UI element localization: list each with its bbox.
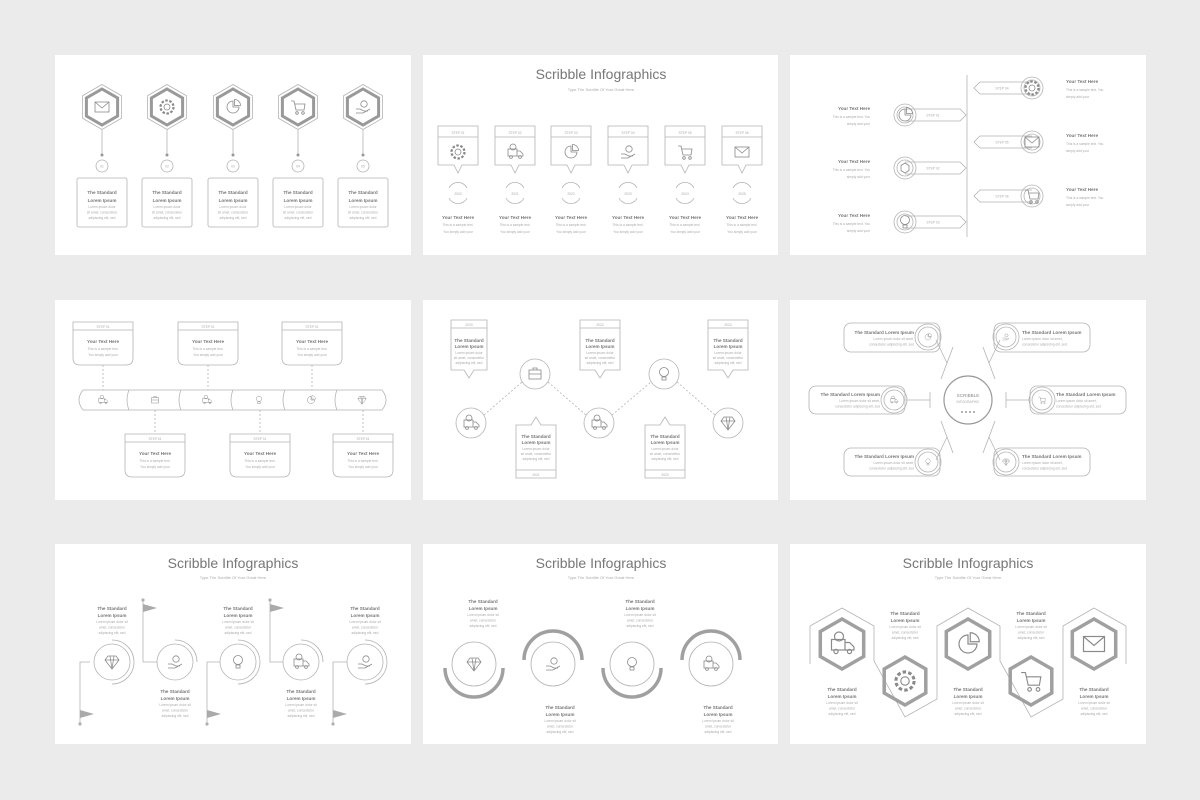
texts: The Standard bbox=[953, 687, 983, 692]
step 05 right bbox=[974, 131, 1104, 153]
texts: amet, consectetur bbox=[829, 706, 856, 710]
step 03 2022 bbox=[551, 126, 591, 234]
texts: Lorem Ipsum bbox=[287, 696, 315, 701]
texts bbox=[96, 606, 381, 718]
callout 2023: The Standard bbox=[650, 434, 680, 439]
texts: adipiscing elit, sed bbox=[547, 730, 574, 734]
bottom box 2: STEP 01 bbox=[253, 437, 267, 441]
center circle bbox=[944, 376, 992, 424]
step 04: 04 bbox=[296, 164, 300, 168]
circle nodes bbox=[452, 642, 733, 686]
step 02 2021 bbox=[495, 126, 535, 234]
step 05 2024: Your Text Here bbox=[669, 215, 701, 220]
pill left bbox=[809, 386, 907, 414]
step 03 left: STEP 03 bbox=[926, 220, 940, 224]
slide backgrounds bbox=[55, 55, 1146, 744]
step 04 right: Your Text Here bbox=[1066, 79, 1098, 84]
callout 2023: 2023 bbox=[661, 473, 669, 477]
texts: amet, consectetur bbox=[705, 724, 732, 728]
step 05 right: This is a sample text. You bbox=[1066, 142, 1104, 146]
callout 2020: The Standard bbox=[454, 338, 484, 343]
callout 2020: Lorem ipsum dolor bbox=[455, 351, 484, 355]
step 05: Lorem Ipsum bbox=[349, 198, 377, 203]
bottom box 2: This is a sample text. bbox=[245, 459, 276, 463]
texts: amet, consectetur bbox=[99, 626, 126, 630]
step 02 left: This is a sample text. You bbox=[833, 168, 870, 172]
callout 2022 bbox=[580, 320, 620, 378]
pill left: Lorem ipsum dolor sit amet, bbox=[839, 399, 880, 403]
slide 9: hexagon chain bbox=[810, 555, 1126, 717]
slide 6: radial mind map bbox=[809, 323, 1126, 476]
texts: Lorem Ipsum bbox=[224, 613, 252, 618]
pill top-right: consectetur adipiscing elit, sed bbox=[1022, 342, 1067, 346]
top box 2: STEP 01 bbox=[201, 325, 215, 329]
step 01: adipiscing elit, sed bbox=[89, 216, 116, 220]
texts: adipiscing elit, sed bbox=[955, 712, 982, 716]
callout 2022: Lorem Ipsum bbox=[586, 344, 614, 349]
callout 2020 bbox=[451, 320, 487, 378]
callout 2024: The Standard bbox=[713, 338, 743, 343]
step 03 left bbox=[833, 211, 966, 233]
callout 2021: adipiscing elit, sed bbox=[523, 457, 550, 461]
texts: The Standard bbox=[160, 689, 190, 694]
pill left: consectetur adipiscing elit, sed bbox=[835, 404, 880, 408]
step 05 2024: 2024 bbox=[681, 192, 689, 196]
step 02: Lorem ipsum dolor bbox=[153, 205, 182, 209]
callout 2023: Lorem Ipsum bbox=[651, 440, 679, 445]
small hex 2 bbox=[884, 657, 926, 705]
bottom box 1: This is a sample text. bbox=[140, 459, 171, 463]
big hex 3 bbox=[946, 619, 990, 669]
title: Scribble Infographics bbox=[536, 66, 666, 82]
step 06 2025: You simply add your bbox=[727, 230, 758, 234]
step 02 2021: You simply add your bbox=[500, 230, 531, 234]
step 02: The Standard bbox=[152, 190, 182, 195]
texts: The Standard bbox=[468, 599, 498, 604]
step 05 2024: This is a sample text. bbox=[670, 223, 701, 227]
texts: Lorem ipsum dolor sit bbox=[1015, 625, 1047, 629]
subtitle: Type The Subtitle Of Your Great Here bbox=[935, 575, 1002, 580]
step 03 2022: You simply add your bbox=[556, 230, 587, 234]
texts: amet, consectetur bbox=[955, 706, 982, 710]
pill top-left: consectetur adipiscing elit, sed bbox=[869, 342, 914, 346]
texts: Lorem Ipsum bbox=[954, 694, 982, 699]
step 03 bbox=[208, 84, 258, 227]
pill top-right: Lorem ipsum dolor sit amet, bbox=[1022, 337, 1063, 341]
step 01 2020: 2020 bbox=[454, 192, 462, 196]
callout 2022: adipiscing elit, sed bbox=[587, 361, 614, 365]
texts: The Standard bbox=[223, 606, 253, 611]
center circle: INFOGRAPHIC bbox=[957, 400, 980, 404]
step 04 right: This is a sample text. You bbox=[1066, 88, 1104, 92]
callout 2023: adipiscing elit, sed bbox=[652, 457, 679, 461]
pill bottom-right bbox=[993, 448, 1090, 476]
pill bottom-right: The Standard Lorem Ipsum bbox=[1022, 454, 1081, 459]
callout 2020: adipiscing elit, sed bbox=[456, 361, 483, 365]
step 03 left: Your Text Here bbox=[838, 213, 870, 218]
step 02: adipiscing elit, sed bbox=[154, 216, 181, 220]
step 04 2023 bbox=[608, 126, 648, 234]
step 06 right: Your Text Here bbox=[1066, 187, 1098, 192]
texts: The Standard bbox=[97, 606, 127, 611]
callout 2021: 2021 bbox=[532, 473, 540, 477]
step 01 2020: Your Text Here bbox=[442, 215, 474, 220]
flag path bbox=[79, 599, 387, 725]
step 02 2021: STEP 02 bbox=[508, 131, 522, 135]
bottom box 1: Your Text Here bbox=[139, 451, 171, 456]
step 03 2022: This is a sample text. bbox=[556, 223, 587, 227]
callout 2021 bbox=[516, 417, 556, 478]
step 04: adipiscing elit, sed bbox=[285, 216, 312, 220]
title: Scribble Infographics bbox=[536, 555, 666, 571]
step 01 2020: STEP 01 bbox=[451, 131, 465, 135]
texts: adipiscing elit, sed bbox=[705, 730, 732, 734]
top box 3: Your Text Here bbox=[296, 339, 328, 344]
step 01: Lorem Ipsum bbox=[88, 198, 116, 203]
step 05 2024 bbox=[665, 126, 705, 234]
pill right: consectetur adipiscing elit, sed bbox=[1056, 404, 1101, 408]
step 01 2020: You simply add your bbox=[443, 230, 474, 234]
step 03: adipiscing elit, sed bbox=[220, 216, 247, 220]
texts: Lorem Ipsum bbox=[1080, 694, 1108, 699]
step 03: Lorem Ipsum bbox=[219, 198, 247, 203]
step 05 right: STEP 05 bbox=[995, 140, 1009, 144]
texts: The Standard bbox=[890, 611, 920, 616]
step 04 2023: You simply add your bbox=[613, 230, 644, 234]
step 04: sit amet, consectetur bbox=[283, 210, 314, 214]
step 06 right: STEP 06 bbox=[995, 194, 1009, 198]
texts: amet, consectetur bbox=[627, 618, 654, 622]
texts: Lorem Ipsum bbox=[161, 696, 189, 701]
circle nodes bbox=[94, 644, 383, 680]
callout 2022: Lorem ipsum dolor bbox=[586, 351, 615, 355]
step 01 left: Your Text Here bbox=[838, 106, 870, 111]
texts: Lorem ipsum dolor sit bbox=[467, 613, 499, 617]
title: Scribble Infographics bbox=[903, 555, 1033, 571]
slide 8: arc chain bbox=[445, 555, 740, 734]
texts: Lorem Ipsum bbox=[469, 606, 497, 611]
top box 2: You simply add your bbox=[193, 353, 224, 357]
step 02: 02 bbox=[165, 164, 169, 168]
step 04 right bbox=[974, 77, 1104, 99]
callout 2021: sit amet, consectetur bbox=[521, 452, 552, 456]
bottom box 1: You simply add your bbox=[140, 465, 171, 469]
callout 2024: sit amet, consectetur bbox=[713, 356, 744, 360]
slide 7: flags and circles bbox=[79, 555, 387, 725]
big hex 5 bbox=[1072, 619, 1116, 669]
circle nodes bbox=[456, 359, 743, 438]
step 05 2024: You simply add your bbox=[670, 230, 701, 234]
bottom box 2: Your Text Here bbox=[244, 451, 276, 456]
step 03 2022: 2022 bbox=[567, 192, 575, 196]
texts bbox=[826, 611, 1110, 716]
texts: amet, consectetur bbox=[352, 626, 379, 630]
thick arcs bbox=[445, 631, 740, 697]
texts: adipiscing elit, sed bbox=[829, 712, 856, 716]
texts: Lorem ipsum dolor sit bbox=[222, 620, 254, 624]
step 01 left bbox=[833, 104, 966, 126]
pill bottom-right: consectetur adipiscing elit, sed bbox=[1022, 466, 1067, 470]
step 03: Lorem ipsum dolor bbox=[219, 205, 248, 209]
step 01 left: This is a sample text. You bbox=[833, 115, 870, 119]
step 02: sit amet, consectetur bbox=[152, 210, 183, 214]
step 04 2023: 2023 bbox=[624, 192, 632, 196]
step 04 2023: Your Text Here bbox=[612, 215, 644, 220]
top box 1: You simply add your bbox=[88, 353, 119, 357]
bottom box 3: You simply add your bbox=[348, 465, 379, 469]
slide 1: hexagon steps bbox=[77, 84, 388, 227]
texts: amet, consectetur bbox=[225, 626, 252, 630]
texts: The Standard bbox=[1079, 687, 1109, 692]
step 01 2020: This is a sample text. bbox=[443, 223, 474, 227]
texts: amet, consectetur bbox=[288, 708, 315, 712]
step 03: The Standard bbox=[218, 190, 248, 195]
step 02 left: Your Text Here bbox=[838, 159, 870, 164]
step 05 2024: STEP 05 bbox=[678, 131, 692, 135]
texts bbox=[467, 599, 734, 734]
texts: Lorem Ipsum bbox=[626, 606, 654, 611]
subtitle: Type The Subtitle Of Your Great Here bbox=[568, 575, 635, 580]
step 01 bbox=[77, 84, 127, 227]
top box 2 bbox=[178, 322, 238, 390]
texts: adipiscing elit, sed bbox=[1081, 712, 1108, 716]
top box 1: This is a sample text. bbox=[88, 347, 119, 351]
subtitle: Type The Subtitle Of Your Great Here bbox=[568, 87, 635, 92]
texts: Lorem ipsum dolor sit bbox=[349, 620, 381, 624]
step 02 left: STEP 02 bbox=[926, 166, 940, 170]
pill right: The Standard Lorem Ipsum bbox=[1056, 392, 1115, 397]
texts: adipiscing elit, sed bbox=[162, 714, 189, 718]
step 01: Lorem ipsum dolor bbox=[88, 205, 117, 209]
step 03 2022: Your Text Here bbox=[555, 215, 587, 220]
texts: adipiscing elit, sed bbox=[99, 631, 126, 635]
step 02 left: simply add your bbox=[847, 175, 871, 179]
pill top-left: The Standard Lorem Ipsum bbox=[855, 330, 914, 335]
texts: adipiscing elit, sed bbox=[352, 631, 379, 635]
step 01 left: simply add your bbox=[847, 122, 871, 126]
step 03: 03 bbox=[231, 164, 235, 168]
texts: adipiscing elit, sed bbox=[627, 624, 654, 628]
step 04 right: STEP 04 bbox=[995, 86, 1009, 90]
step 02 2021: This is a sample text. bbox=[500, 223, 531, 227]
texts: Lorem ipsum dolor sit bbox=[952, 701, 984, 705]
step 05: The Standard bbox=[348, 190, 378, 195]
step 06 2025: Your Text Here bbox=[726, 215, 758, 220]
band bbox=[79, 390, 386, 410]
bottom box 1 bbox=[125, 410, 185, 477]
step 03: sit amet, consectetur bbox=[218, 210, 249, 214]
center circle: SCRIBBLE bbox=[957, 393, 979, 398]
texts: Lorem ipsum dolor sit bbox=[624, 613, 656, 617]
texts: Lorem Ipsum bbox=[546, 712, 574, 717]
callout 2022: The Standard bbox=[585, 338, 615, 343]
callout 2020: 2020 bbox=[465, 323, 473, 327]
texts: The Standard bbox=[350, 606, 380, 611]
step 04: Lorem Ipsum bbox=[284, 198, 312, 203]
callout 2022: sit amet, consectetur bbox=[585, 356, 616, 360]
texts: adipiscing elit, sed bbox=[1018, 636, 1045, 640]
step 04 2023: This is a sample text. bbox=[613, 223, 644, 227]
callout 2021: Lorem ipsum dolor bbox=[522, 447, 551, 451]
texts: Lorem ipsum dolor sit bbox=[1078, 701, 1110, 705]
step 02 bbox=[142, 84, 192, 227]
slide 5: zigzag timeline bbox=[451, 320, 748, 478]
step 03 left: simply add your bbox=[847, 229, 871, 233]
texts: Lorem ipsum dolor sit bbox=[159, 703, 191, 707]
step 06 right: This is a sample text. You bbox=[1066, 196, 1104, 200]
texts: Lorem Ipsum bbox=[98, 613, 126, 618]
step 02 2021: Your Text Here bbox=[499, 215, 531, 220]
texts: adipiscing elit, sed bbox=[225, 631, 252, 635]
slide 2: timeline steps bbox=[438, 66, 762, 234]
step 06 2025 bbox=[722, 126, 762, 234]
top box 2: Your Text Here bbox=[192, 339, 224, 344]
texts: Lorem Ipsum bbox=[1017, 618, 1045, 623]
callout 2020: sit amet, consectetur bbox=[454, 356, 485, 360]
callout 2021: The Standard bbox=[521, 434, 551, 439]
texts: The Standard bbox=[827, 687, 857, 692]
pill right bbox=[1029, 386, 1126, 414]
step 02 2021: 2021 bbox=[511, 192, 519, 196]
step 04: Lorem ipsum dolor bbox=[284, 205, 313, 209]
callout 2021: Lorem Ipsum bbox=[522, 440, 550, 445]
pill top-left bbox=[844, 323, 941, 352]
step 01: 01 bbox=[100, 164, 104, 168]
texts: amet, consectetur bbox=[162, 708, 189, 712]
bottom box 2: You simply add your bbox=[245, 465, 276, 469]
step 06 right bbox=[974, 185, 1104, 207]
step 03 left: This is a sample text. You bbox=[833, 222, 870, 226]
texts: amet, consectetur bbox=[892, 630, 919, 634]
texts: Lorem ipsum dolor sit bbox=[285, 703, 317, 707]
step 05: adipiscing elit, sed bbox=[350, 216, 377, 220]
callout 2024: Lorem Ipsum bbox=[714, 344, 742, 349]
pill bottom-left bbox=[844, 448, 941, 476]
dashed connectors bbox=[484, 382, 715, 415]
texts: Lorem Ipsum bbox=[891, 618, 919, 623]
step 05: sit amet, consectetur bbox=[348, 210, 379, 214]
texts: adipiscing elit, sed bbox=[892, 636, 919, 640]
texts: amet, consectetur bbox=[1081, 706, 1108, 710]
pill left: The Standard Lorem Ipsum bbox=[821, 392, 880, 397]
step 01 2020 bbox=[438, 126, 478, 234]
pill bottom-left: consectetur adipiscing elit, sed bbox=[869, 466, 914, 470]
texts: Lorem Ipsum bbox=[704, 712, 732, 717]
step 06 2025: 2025 bbox=[738, 192, 746, 196]
step 06 2025: This is a sample text. bbox=[727, 223, 758, 227]
top box 3: STEP 01 bbox=[305, 325, 319, 329]
callout 2024: adipiscing elit, sed bbox=[715, 361, 742, 365]
callout 2023 bbox=[645, 417, 685, 478]
step 03 2022: STEP 03 bbox=[564, 131, 578, 135]
step 04 bbox=[273, 84, 323, 227]
slide 3: vertical arrow timeline bbox=[833, 75, 1104, 237]
top box 3 bbox=[282, 322, 342, 390]
texts: Lorem ipsum dolor sit bbox=[544, 719, 576, 723]
slide 4: band timeline bbox=[73, 322, 393, 477]
bottom box 1: STEP 01 bbox=[148, 437, 162, 441]
bottom box 2 bbox=[230, 410, 290, 477]
step 04 2023: STEP 04 bbox=[621, 131, 635, 135]
bottom box 3 bbox=[333, 410, 393, 477]
top box 1: STEP 01 bbox=[96, 325, 110, 329]
texts: Lorem Ipsum bbox=[351, 613, 379, 618]
texts: The Standard bbox=[1016, 611, 1046, 616]
callout 2023: sit amet, consectetur bbox=[650, 452, 681, 456]
pill bottom-right: Lorem ipsum dolor sit amet, bbox=[1022, 461, 1063, 465]
bottom box 3: This is a sample text. bbox=[348, 459, 379, 463]
texts: Lorem Ipsum bbox=[828, 694, 856, 699]
big hex 1 bbox=[820, 619, 864, 669]
callout 2023: Lorem ipsum dolor bbox=[651, 447, 680, 451]
step 02 left bbox=[833, 157, 966, 179]
step 01: sit amet, consectetur bbox=[87, 210, 118, 214]
pill top-left: Lorem ipsum dolor sit amet, bbox=[873, 337, 914, 341]
step 06 right: simply add your bbox=[1066, 203, 1090, 207]
step 05: Lorem ipsum dolor bbox=[349, 205, 378, 209]
texts: Lorem ipsum dolor sit bbox=[96, 620, 128, 624]
callout 2024: 2024 bbox=[724, 323, 732, 327]
connectors bbox=[906, 340, 1030, 460]
step 05 bbox=[338, 84, 388, 227]
texts: amet, consectetur bbox=[1018, 630, 1045, 634]
pill top-right bbox=[993, 323, 1090, 352]
texts: adipiscing elit, sed bbox=[470, 624, 497, 628]
bottom box 3: STEP 01 bbox=[356, 437, 370, 441]
pill right: Lorem ipsum dolor sit amet, bbox=[1056, 399, 1097, 403]
callout 2020: Lorem Ipsum bbox=[455, 344, 483, 349]
step 05: 05 bbox=[361, 164, 365, 168]
texts: Lorem ipsum dolor sit bbox=[826, 701, 858, 705]
step 01 left: STEP 01 bbox=[926, 113, 940, 117]
pill bottom-left: Lorem ipsum dolor sit amet, bbox=[873, 461, 914, 465]
top box 3: This is a sample text. bbox=[297, 347, 328, 351]
step 05 right: simply add your bbox=[1066, 149, 1090, 153]
callout 2024 bbox=[708, 320, 748, 378]
step 02: Lorem Ipsum bbox=[153, 198, 181, 203]
texts: amet, consectetur bbox=[547, 724, 574, 728]
step 06 2025: STEP 06 bbox=[735, 131, 749, 135]
texts: The Standard bbox=[545, 705, 575, 710]
step 04 right: simply add your bbox=[1066, 95, 1090, 99]
top box 2: This is a sample text. bbox=[193, 347, 224, 351]
callout 2022: 2022 bbox=[596, 323, 604, 327]
pill bottom-left: The Standard Lorem Ipsum bbox=[855, 454, 914, 459]
texts: Lorem ipsum dolor sit bbox=[702, 719, 734, 723]
bottom box 3: Your Text Here bbox=[347, 451, 379, 456]
texts: amet, consectetur bbox=[470, 618, 497, 622]
callout 2024: Lorem ipsum dolor bbox=[714, 351, 743, 355]
title: Scribble Infographics bbox=[168, 555, 298, 571]
texts: adipiscing elit, sed bbox=[288, 714, 315, 718]
outer outline bbox=[810, 608, 1126, 717]
step 04: The Standard bbox=[283, 190, 313, 195]
step 01: The Standard bbox=[87, 190, 117, 195]
top box 1 bbox=[73, 322, 133, 390]
subtitle: Type The Subtitle Of Your Great Here bbox=[200, 575, 267, 580]
step 05 right: Your Text Here bbox=[1066, 133, 1098, 138]
texts: The Standard bbox=[625, 599, 655, 604]
texts: The Standard bbox=[703, 705, 733, 710]
top box 1: Your Text Here bbox=[87, 339, 119, 344]
texts: Lorem ipsum dolor sit bbox=[889, 625, 921, 629]
pill top-right: The Standard Lorem Ipsum bbox=[1022, 330, 1081, 335]
texts: The Standard bbox=[286, 689, 316, 694]
top box 3: You simply add your bbox=[297, 353, 328, 357]
small hex 4 bbox=[1010, 657, 1052, 705]
